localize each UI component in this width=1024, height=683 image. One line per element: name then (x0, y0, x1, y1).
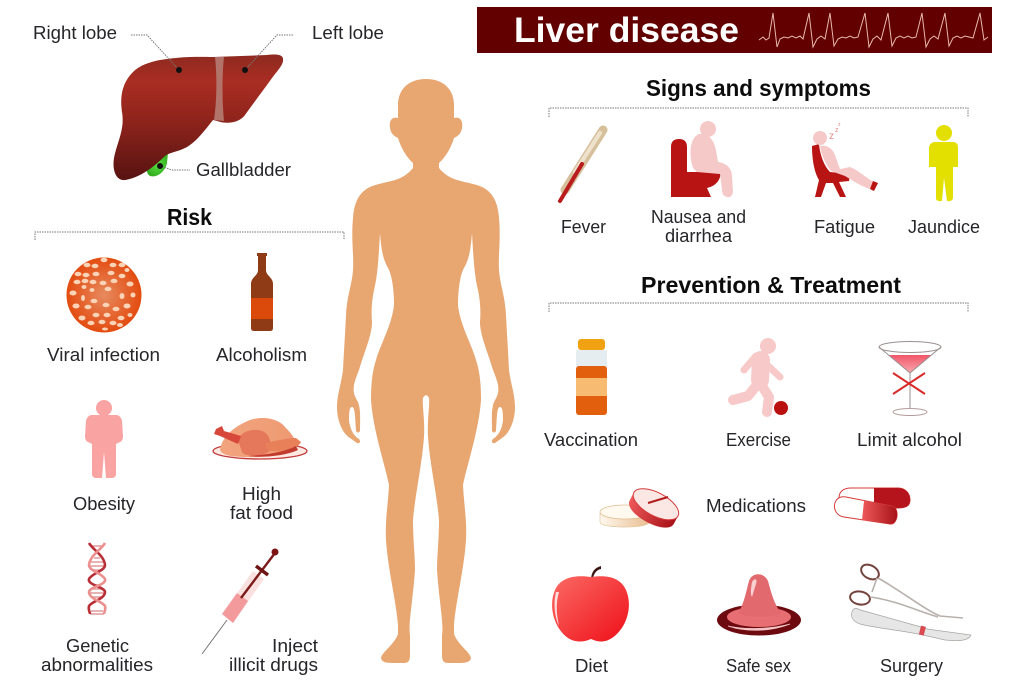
icon: virus (66, 258, 142, 332)
label: genetic abnormalities (41, 635, 153, 675)
label: nausea and diarrhea: diarrhea (665, 225, 733, 246)
icon: vaccine vial (576, 339, 607, 415)
label: nausea and diarrhea (651, 206, 746, 246)
liver ligament (214, 57, 224, 121)
icon: gallbladder (147, 152, 168, 176)
figure: human body silhouette (337, 79, 515, 663)
zzz (829, 122, 841, 142)
label: high fat food (230, 483, 293, 523)
label: diet: Diet (575, 655, 608, 676)
tablet score line (648, 497, 668, 503)
icon: tired person in chair (812, 122, 878, 197)
icon: liver (113, 54, 283, 180)
icon: syringe (202, 548, 278, 654)
label: genetic abnormalities: Genetic (66, 635, 129, 656)
bracket (35, 232, 344, 240)
label: gallbladder: Gallbladder (196, 159, 291, 180)
label: nausea and diarrhea: Nausea and (651, 206, 746, 227)
icon: apple (552, 566, 629, 642)
label: genetic abnormalities: abnormalities (41, 654, 153, 675)
title: Liver disease (514, 11, 739, 50)
label: jaundice: Jaundice (908, 216, 980, 237)
label: medications: Medications (706, 495, 806, 516)
icon: heartbeat trace (759, 13, 988, 47)
label: alcoholism: Alcoholism (216, 344, 307, 365)
heading: risk: Risk (167, 204, 213, 230)
icon: cocktail glass crossed out (879, 342, 941, 416)
icon: surgical forceps and scalpel (849, 562, 971, 641)
icon: DNA helix (89, 543, 105, 614)
label: fatigue: Fatigue (814, 216, 875, 237)
panel: signs and symptoms (549, 75, 980, 246)
zzz: z (835, 127, 839, 134)
icon: jaundiced figure (929, 125, 958, 201)
banner background (477, 7, 992, 53)
label: surgery: Surgery (880, 655, 944, 676)
icon: condom (717, 574, 801, 636)
leader lines (131, 35, 293, 170)
bracket (549, 303, 968, 312)
panel: prevention and treatment (544, 272, 971, 676)
icon: tablets (600, 482, 683, 534)
icon: roast chicken (213, 418, 307, 459)
label: inject illicit drugs (229, 635, 318, 675)
zzz: z (829, 131, 834, 142)
icon: capsules (834, 488, 910, 524)
label: high fat food: High (242, 483, 281, 504)
icon: thermometer (560, 130, 603, 201)
label: obesity: Obesity (73, 493, 136, 514)
label: inject illicit drugs: illicit drugs (229, 654, 318, 675)
panel: title banner (477, 7, 992, 53)
panel: risk (35, 204, 344, 675)
label: limit alcohol: Limit alcohol (857, 429, 962, 450)
icon: person on toilet (671, 121, 733, 197)
heading: signs and symptoms: Signs and symptoms (646, 75, 871, 101)
icon: bottle (251, 253, 273, 331)
icon: obese figure (85, 400, 123, 478)
label: high fat food: fat food (230, 502, 293, 523)
bracket (549, 108, 968, 117)
label: right lobe: Right lobe (33, 22, 117, 43)
icon: exercise figure with ball (733, 338, 788, 415)
label: left lobe: Left lobe (312, 22, 384, 43)
heading: prevention and treatment: Prevention & Treatment (641, 272, 901, 298)
zzz: z (838, 122, 841, 128)
label: vaccination: Vaccination (544, 429, 638, 450)
label: viral infection: Viral infection (47, 344, 160, 365)
label: safe sex: Safe sex (726, 655, 792, 676)
label: fever: Fever (561, 216, 606, 237)
label: exercise: Exercise (726, 429, 791, 450)
panel: liver diagram (33, 22, 384, 180)
label: inject illicit drugs: Inject (272, 635, 318, 656)
